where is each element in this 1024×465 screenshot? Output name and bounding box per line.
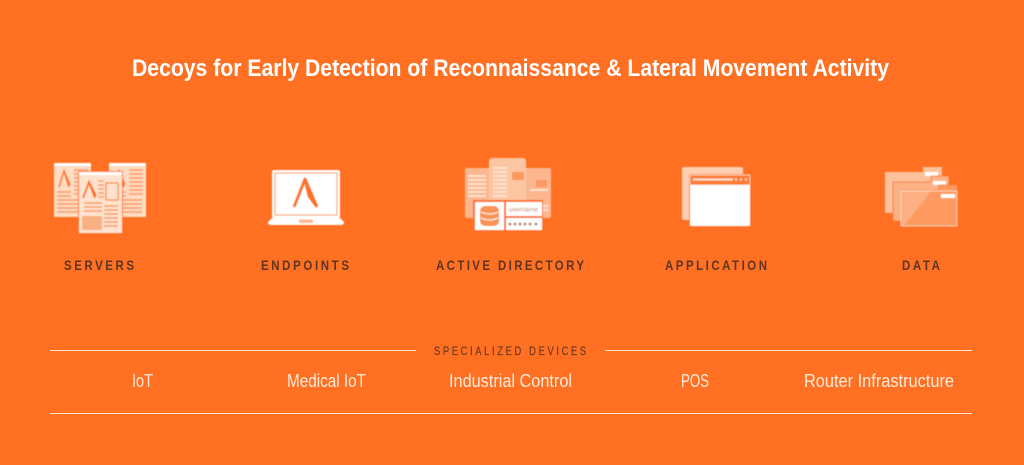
divider: bottom	[50, 413, 972, 414]
device: IoT: IoT	[132, 371, 153, 391]
icon: servers	[54, 163, 146, 234]
divider: top right	[605, 350, 972, 351]
icon: application windows	[682, 167, 751, 227]
label: endpoints: ENDPOINTS	[261, 257, 349, 273]
device: Router Infrastructure: Router Infrastructure	[804, 371, 954, 391]
icon: active directory	[465, 158, 551, 232]
label: active directory: ACTIVE DIRECTORY	[436, 257, 584, 273]
password dots	[509, 223, 537, 225]
icon: endpoints laptop	[268, 170, 344, 225]
label: data: DATA	[902, 257, 940, 273]
username field: username	[509, 206, 538, 214]
label: application: APPLICATION	[665, 257, 767, 273]
icon: database cylinder	[480, 206, 499, 226]
device: Medical IoT: Medical IoT	[287, 371, 366, 391]
divider: top left	[50, 350, 416, 351]
device: POS: POS	[681, 371, 709, 391]
heading: specialized devices: SPECIALIZED DEVICES	[434, 345, 586, 358]
title: Decoys for Early Detection of Reconnaissance & Lateral Movement Activity	[132, 55, 890, 82]
label: servers: SERVERS	[64, 257, 134, 273]
device: Industrial Control: Industrial Control	[449, 371, 572, 391]
icon: data folders	[885, 167, 957, 226]
